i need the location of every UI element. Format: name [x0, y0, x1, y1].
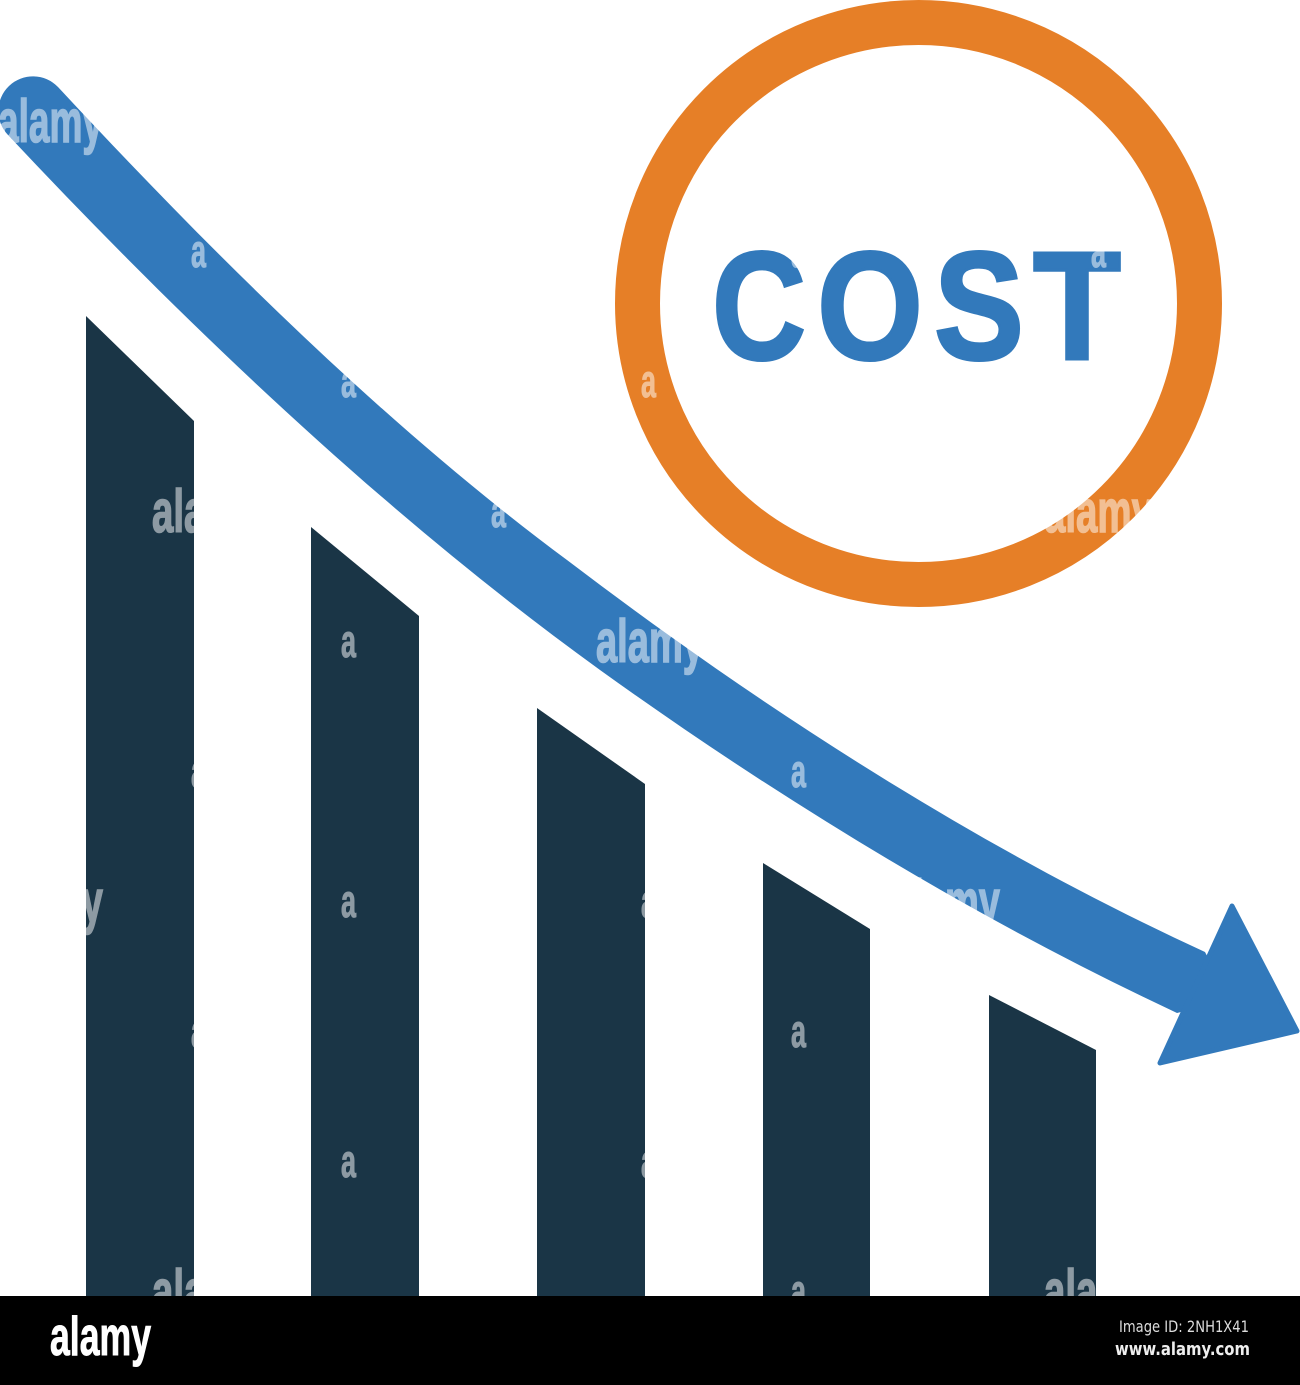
watermark overlay: alamy: [0, 88, 103, 155]
watermark overlay: a: [341, 1135, 356, 1187]
bar chart: [86, 316, 1096, 1296]
watermark overlay: a: [191, 745, 206, 797]
watermark overlay: a: [641, 1135, 656, 1187]
watermark overlay: a: [791, 745, 806, 797]
watermark overlay: alamy: [892, 868, 1000, 935]
watermark overlay: a: [641, 875, 656, 927]
heading: COST: T: [1033, 220, 1121, 392]
watermark overlay: a: [791, 225, 806, 277]
watermark overlay: alamy: [152, 478, 261, 545]
heading: COST: C: [712, 220, 806, 392]
watermark overlay: a: [1091, 225, 1106, 277]
heading: COST: O: [817, 220, 923, 392]
icon: cost circle: [638, 22, 1200, 584]
watermark overlay: a: [641, 355, 656, 407]
watermark overlay: alamy: [1044, 478, 1153, 545]
watermark overlay: a: [791, 1005, 806, 1057]
watermark overlay: a: [191, 1005, 206, 1057]
watermark overlay: alamy: [596, 608, 704, 675]
watermark overlay: a: [491, 485, 506, 537]
watermark overlay: alamy: [1044, 1258, 1153, 1325]
footer bar: [0, 1296, 1300, 1385]
watermark overlay: a: [341, 355, 356, 407]
footer image id: Image ID: 2NH1X41: [1119, 1317, 1249, 1336]
arrow: falling cost trend: [0, 76, 1297, 1063]
footer logo: alamy: [50, 1305, 151, 1367]
watermark overlay: a: [191, 225, 206, 277]
heading: COST: S: [934, 220, 1024, 392]
watermark overlay: a: [791, 1265, 806, 1317]
watermark overlay: a: [341, 615, 356, 667]
footer url: www.alamy.com: [1115, 1339, 1250, 1360]
watermark overlay: [0, 88, 1153, 1325]
watermark overlay: alamy: [0, 868, 103, 935]
heading: COST: [712, 220, 1121, 392]
watermark overlay: alamy: [152, 1258, 261, 1325]
watermark overlay: a: [341, 875, 356, 927]
